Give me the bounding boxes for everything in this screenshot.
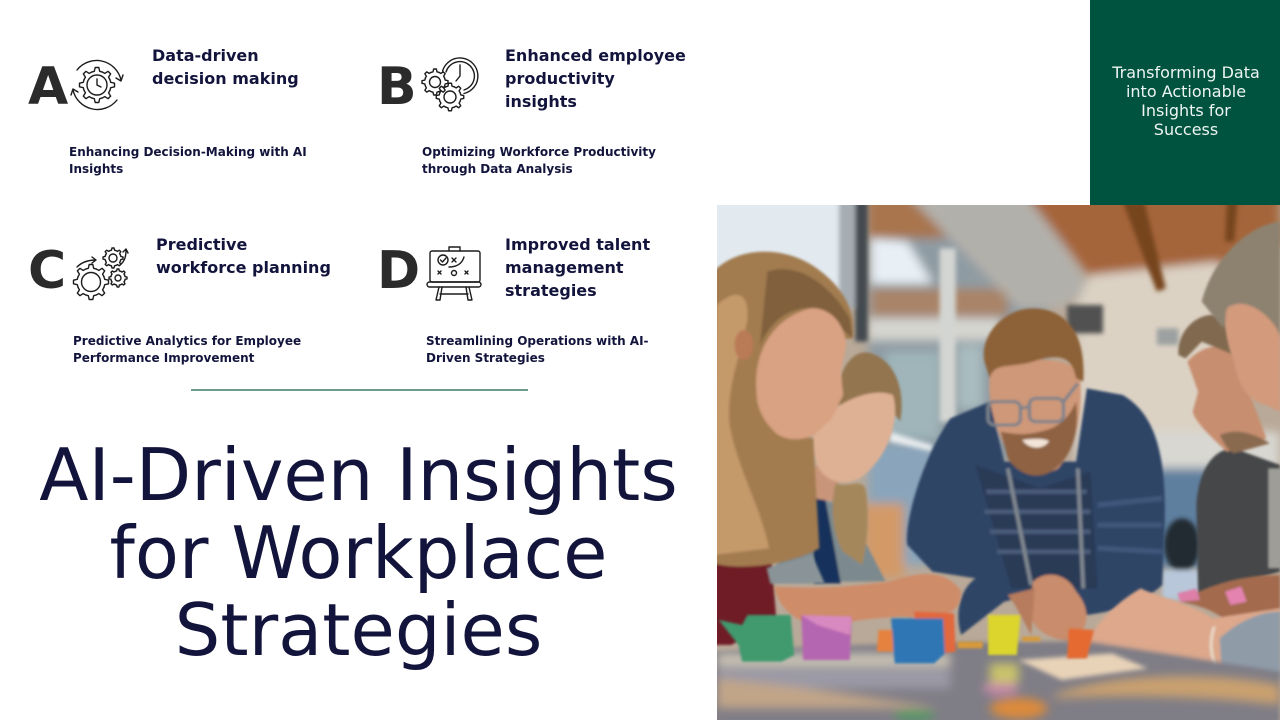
panel: block C [28,235,331,365]
description A: Insights [69,162,123,176]
heading A [152,46,299,88]
heading C: Predictive [156,235,247,254]
description B: Optimizing Workforce Productivity [422,145,656,159]
description C [73,334,301,365]
letter D: D [377,241,420,301]
heading D [505,235,650,300]
callout text: into Actionable [1126,82,1246,101]
description C: Performance Improvement [73,351,254,365]
icon: gears with clock [421,57,479,112]
heading D: strategies [505,281,597,300]
description D: Streamlining Operations with AI- [426,334,649,348]
description A: Enhancing Decision-Making with AI [69,145,307,159]
heading D: Improved talent [505,235,650,254]
icon: gear with clock and cycle arrows [70,60,124,110]
panel: block A [28,46,307,176]
heading D: management [505,258,624,277]
heading B [505,46,686,111]
title: AI-Driven Insights [39,433,678,517]
description B: through Data Analysis [422,162,573,176]
man right 1 [1178,315,1280,595]
man center [907,308,1165,642]
man right 2 [1202,222,1280,568]
callout text: Insights for [1141,101,1231,120]
background [706,195,1280,578]
icon: three gears with arrows [72,247,129,300]
heading C [156,235,331,277]
callout text: Transforming Data [1112,63,1260,82]
letter B: B [377,57,417,117]
panel: block D [377,235,650,365]
description C: Predictive Analytics for Employee [73,334,301,348]
hands and forearms right [1087,575,1280,678]
description B [422,145,656,176]
heading B: Enhanced employee [505,46,686,65]
coloured blocks [719,612,1094,663]
description A [69,145,307,176]
heading A: decision making [152,69,299,88]
table [713,642,1280,720]
description D [426,334,649,365]
woman 1 [713,252,961,645]
description D: Driven Strategies [426,351,545,365]
letter C: C [28,241,66,301]
title: Strategies [175,588,542,672]
panel: green callout [1090,0,1280,205]
heading A: Data-driven [152,46,259,65]
title [39,433,678,672]
woman 2 [767,352,902,583]
panel: block B [377,46,686,176]
heading B: productivity [505,69,615,88]
photo: team collaborating around table with colorful blocks [717,205,1280,720]
letter A: A [28,57,68,117]
callout text [1112,63,1260,139]
title: for Workplace [110,511,607,595]
icon: strategy board on easel [426,246,482,301]
callout text: Success [1154,120,1218,139]
heading B: insights [505,92,577,111]
heading C: workforce planning [156,258,331,277]
